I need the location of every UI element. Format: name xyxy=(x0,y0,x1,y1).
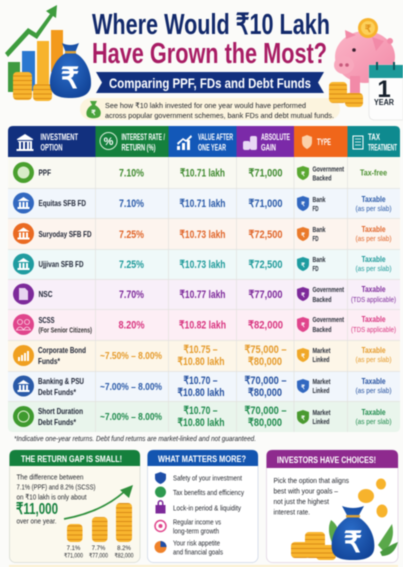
table header row: OPTION xyxy=(40,142,62,152)
panel: what matters more xyxy=(148,450,258,562)
table header row: INTEREST RATE / xyxy=(122,132,165,142)
row: Ujjivan SFB FD: Ujjivan SFB FD xyxy=(38,259,84,269)
panel: what matters more: Your risk appetite xyxy=(173,538,220,548)
panel: investors have choices: Pick the option that aligns xyxy=(274,476,349,485)
illustration: piggy bank, coins and calendar: ₹ xyxy=(365,24,372,35)
row: NSC: Government xyxy=(312,287,345,294)
title: Have Grown the Most? xyxy=(92,38,327,70)
row: NSC: Backed xyxy=(312,297,332,304)
row: Suryoday SFB FD: Suryoday SFB FD xyxy=(38,229,92,239)
table header row: RETURN (%) xyxy=(122,142,156,152)
panel: investors have choices xyxy=(266,450,398,562)
row: NSC: (TDS applicable) xyxy=(351,297,396,304)
row: Suryoday SFB FD: Taxable xyxy=(362,225,386,234)
panel: what matters more: Lock-in period & liquidity xyxy=(173,504,241,512)
row: Banking and PSU Debt Funds: ~7.00% – 8.00% xyxy=(100,382,162,393)
row: SCSS: Backed xyxy=(312,327,332,334)
illustration: growth chart with money bag: ₹ xyxy=(61,63,79,95)
row: Banking and PSU Debt Funds: ₹10.70 – xyxy=(184,375,218,387)
row: PPF: ₹10.71 lakh xyxy=(180,168,225,180)
row: Corporate Bond Funds: Market xyxy=(312,348,331,355)
row: Short Duration Debt Funds: ₹70,000 – xyxy=(244,405,286,417)
row: Corporate Bond Funds: ₹80,000 xyxy=(248,356,282,368)
row: Equitas SFB FD: ₹71,000 xyxy=(248,198,282,210)
illustration: growth chart with money bag xyxy=(5,5,91,101)
row: Corporate Bond Funds: Taxable xyxy=(362,346,386,355)
row: PPF: Backed xyxy=(312,176,332,182)
row: NSC: ₹10.77 lakh xyxy=(180,289,226,301)
row: Ujjivan SFB FD: Bank xyxy=(312,257,326,264)
table header row: INVESTMENT xyxy=(40,132,78,142)
row: Corporate Bond Funds: Corporate Bond xyxy=(38,345,86,355)
row: Equitas SFB FD: Equitas SFB FD xyxy=(38,198,86,208)
panel: what matters more: Tax benefits and efficiency xyxy=(173,488,244,497)
row: Corporate Bond Funds: ₹10.80 lakh xyxy=(178,356,225,368)
icon: padlock xyxy=(156,500,166,514)
comparison table xyxy=(8,126,400,432)
chart: coin stacks: ₹71,000 xyxy=(64,552,84,560)
row: Equitas SFB FD: (as per slab) xyxy=(356,206,392,213)
intro note with icon: ₹ xyxy=(91,109,96,117)
title xyxy=(92,9,330,70)
row: Banking and PSU Debt Funds: Linked xyxy=(312,388,330,395)
row: SCSS: Government xyxy=(312,317,345,324)
panel: the return gap is small: THE RETURN GAP IS SMALL! xyxy=(21,454,122,465)
panel: investors have choices: best with your goals – xyxy=(274,486,339,496)
panel: investors have choices: interest rate. xyxy=(274,508,310,516)
row: NSC: NSC xyxy=(38,289,52,299)
bottom strip xyxy=(9,565,398,567)
table header row: VALUE AFTER xyxy=(198,132,233,142)
row: Suryoday SFB FD: 7.25% xyxy=(119,229,144,241)
row: Ujjivan SFB FD: ₹10.73 lakh xyxy=(180,259,226,271)
illustration: piggy bank, coins and calendar: YEAR xyxy=(374,98,394,107)
row: Short Duration Debt Funds: Linked xyxy=(312,419,330,426)
chart: coin stacks xyxy=(64,503,134,560)
footnote: *Indicative one-year returns. Debt fund returns are market-linked and not guaranteed. xyxy=(14,436,256,443)
row: PPF: ₹ xyxy=(301,171,305,178)
row: Equitas SFB FD: FD xyxy=(312,206,318,213)
table header row: ABSOLUTE xyxy=(261,132,290,142)
row: Short Duration Debt Funds: ₹80,000 xyxy=(248,417,282,429)
row: SCSS: ₹82,000 xyxy=(248,320,283,332)
row: Short Duration Debt Funds: ~7.00% – 8.00% xyxy=(100,412,162,423)
row: Banking and PSU Debt Funds: Banking & PSU xyxy=(38,376,84,386)
panel: the return gap is small: on ₹10 lakh is only about xyxy=(16,492,87,502)
chart: coin stacks: ₹82,000 xyxy=(114,552,134,560)
row: Banking and PSU Debt Funds: (as per slab) xyxy=(356,388,392,395)
illustration: piggy bank, coins and calendar xyxy=(329,18,403,120)
row: Ujjivan SFB FD: FD xyxy=(312,266,318,273)
row: Corporate Bond Funds: ₹10.75 – xyxy=(184,344,218,356)
row: Short Duration Debt Funds: ₹10.70 – xyxy=(184,405,218,417)
intro note with icon: across popular government schemes, bank FDs and debt mutual funds. xyxy=(105,111,334,120)
row: PPF: Tax-free xyxy=(360,168,387,178)
title: Where Would ₹10 Lakh xyxy=(92,9,330,41)
illustration: money bag with coins and leaves: ₹ xyxy=(344,527,362,559)
row: Corporate Bond Funds: Funds* xyxy=(38,356,61,366)
row: Ujjivan SFB FD: (as per slab) xyxy=(356,266,392,273)
row: PPF: 7.10% xyxy=(119,168,144,180)
row: NSC: 7.70% xyxy=(119,289,144,301)
panel: investors have choices: not just the highest xyxy=(274,497,330,506)
row: Short Duration Debt Funds: ₹ xyxy=(301,415,305,422)
row: NSC: Taxable xyxy=(362,285,386,294)
panel: what matters more: and financial goals xyxy=(173,548,223,556)
row: Suryoday SFB FD: FD xyxy=(312,236,318,243)
row: Banking and PSU Debt Funds: Debt Funds* xyxy=(38,387,77,397)
chart: coin stacks: 7.1% xyxy=(67,546,81,552)
row: Banking and PSU Debt Funds: ₹80,000 xyxy=(248,387,282,399)
row: Suryoday SFB FD xyxy=(13,223,392,244)
row: Banking and PSU Debt Funds: Market xyxy=(312,379,331,386)
row: Corporate Bond Funds: ₹ xyxy=(301,353,305,360)
row: Equitas SFB FD: 7.10% xyxy=(119,198,144,210)
row: Equitas SFB FD: Taxable xyxy=(362,195,386,204)
table header row: TYPE xyxy=(317,137,331,147)
row: Short Duration Debt Funds: Market xyxy=(312,410,331,417)
row: Corporate Bond Funds: (as per slab) xyxy=(356,357,392,364)
row: Equitas SFB FD: Bank xyxy=(312,197,326,204)
row: PPF: ₹71,000 xyxy=(248,168,282,180)
row: Short Duration Debt Funds: Taxable xyxy=(362,408,386,417)
row: Short Duration Debt Funds: ₹10.80 lakh xyxy=(178,417,225,429)
table header row: % xyxy=(104,136,114,148)
row: Banking and PSU Debt Funds: ₹ xyxy=(301,384,305,391)
table header row: TAX xyxy=(368,132,380,142)
row: SCSS xyxy=(13,314,396,335)
row: SCSS: Taxable xyxy=(362,315,386,324)
row: Banking and PSU Debt Funds: ₹10.80 lakh xyxy=(178,387,225,399)
row: Equitas SFB FD: ₹10.71 lakh xyxy=(180,198,226,210)
row: NSC: ₹77,000 xyxy=(248,289,282,301)
panel: the return gap is small: 7.1% (PPF) and 8.2% (SCSS) xyxy=(16,482,96,492)
row: SCSS: (TDS applicable) xyxy=(351,327,396,334)
table header row xyxy=(8,126,400,157)
row: Corporate Bond Funds: ₹75,000 – xyxy=(244,344,286,356)
row: Short Duration Debt Funds: (as per slab) xyxy=(356,419,392,426)
row: Corporate Bond Funds xyxy=(13,344,392,368)
subtitle ribbon: Comparing PPF, FDs and Debt Funds xyxy=(109,75,311,91)
row: Short Duration Debt Funds: Debt Funds* xyxy=(38,417,77,427)
subtitle ribbon xyxy=(96,72,324,93)
panel: what matters more: Safety of your investment xyxy=(173,474,243,482)
row: SCSS: 8.20% xyxy=(118,320,145,332)
icon: target xyxy=(155,520,166,532)
row: Banking and PSU Debt Funds xyxy=(13,375,392,399)
row: Corporate Bond Funds: ~7.50% – 8.00% xyxy=(100,351,162,362)
row: Banking and PSU Debt Funds: Taxable xyxy=(362,377,386,386)
panel: the return gap is small: ₹11,000 xyxy=(16,501,58,518)
row: Equitas SFB FD: ₹ xyxy=(301,201,305,208)
panel: the return gap is small xyxy=(10,450,140,562)
row: Ujjivan SFB FD: ₹ xyxy=(301,262,305,269)
row: PPF xyxy=(13,162,387,183)
row: PPF: PPF xyxy=(38,168,51,178)
panel: the return gap is small: over one year. xyxy=(16,516,56,526)
row: Ujjivan SFB FD: ₹72,500 xyxy=(248,259,282,271)
row: SCSS: (For Senior Citizens) xyxy=(38,328,92,334)
table header row: ONE YEAR xyxy=(198,142,226,152)
row: NSC xyxy=(13,284,396,304)
row: Banking and PSU Debt Funds: ₹70,000 – xyxy=(244,375,286,387)
row: Ujjivan SFB FD: Taxable xyxy=(362,255,386,264)
icon: pie chart xyxy=(154,541,166,553)
intro note with icon xyxy=(80,98,340,120)
row: NSC: ₹ xyxy=(301,292,305,299)
arrow: growth xyxy=(64,485,133,519)
intro note with icon: See how ₹10 lakh invested for one year would have performed xyxy=(105,101,306,110)
illustration: piggy bank, coins and calendar: 1 xyxy=(377,76,391,103)
table row backgrounds xyxy=(8,157,400,432)
row: Suryoday SFB FD: (as per slab) xyxy=(356,236,392,243)
row: Suryoday SFB FD: ₹ xyxy=(301,232,305,239)
row: Corporate Bond Funds: Linked xyxy=(312,357,330,364)
row: Ujjivan SFB FD: 7.25% xyxy=(119,259,144,271)
chart: coin stacks: 7.7% xyxy=(92,546,106,552)
panel: the return gap is small: The difference between xyxy=(16,472,84,482)
row: SCSS: ₹ xyxy=(301,322,305,329)
table header row: GAIN xyxy=(261,142,276,152)
row: PPF: Government xyxy=(312,166,345,174)
icon: shield xyxy=(155,472,166,484)
chart: coin stacks: ₹77,000 xyxy=(89,552,109,560)
panel: what matters more: long-term growth xyxy=(173,526,219,536)
row: Short Duration Debt Funds xyxy=(13,405,392,429)
row: Ujjivan SFB FD xyxy=(13,254,392,274)
row: Suryoday SFB FD: ₹72,500 xyxy=(248,229,282,241)
panel: what matters more: WHAT MATTERS MORE? xyxy=(158,454,246,465)
row: Equitas SFB FD xyxy=(13,192,392,214)
row: SCSS: SCSS xyxy=(38,315,55,325)
icon: tax coin xyxy=(155,486,166,498)
chart: coin stacks: 8.2% xyxy=(117,546,131,552)
row: Suryoday SFB FD: Bank xyxy=(312,227,326,234)
panel: what matters more: Regular income vs xyxy=(173,518,221,526)
row: Short Duration Debt Funds: Short Duration xyxy=(38,406,83,416)
row: SCSS: ₹10.82 lakh xyxy=(179,320,226,332)
row: Suryoday SFB FD: ₹10.73 lakh xyxy=(180,229,226,241)
